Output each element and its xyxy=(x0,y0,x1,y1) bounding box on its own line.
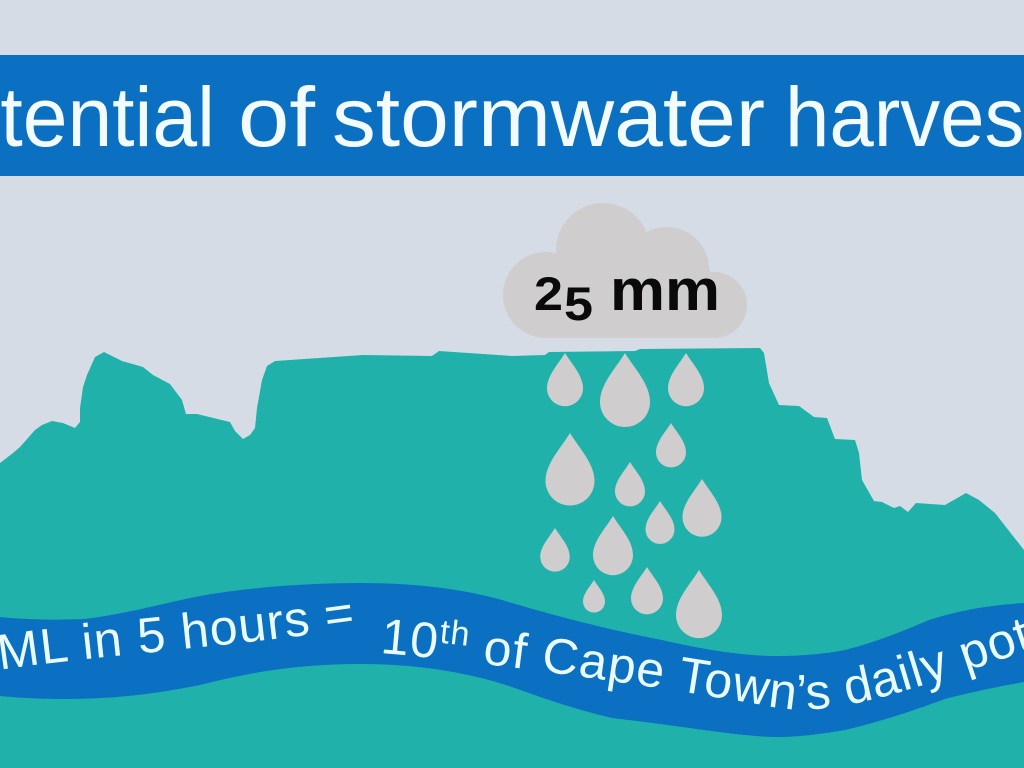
rainfall amount: mm xyxy=(610,258,720,323)
mountain silhouette: Table Mountain xyxy=(0,348,1024,768)
rainfall amount xyxy=(534,258,720,330)
rainfall amount: 5 xyxy=(564,277,593,330)
banner text: volume: ML in 5 hours = xyxy=(0,604,352,670)
rainfall amount: 2 xyxy=(534,267,563,320)
title banner: stormwater xyxy=(332,70,765,164)
banner text: share of potable demand: 10 xyxy=(384,620,436,658)
title banner xyxy=(0,55,1024,176)
banner text: share of potable demand: th xyxy=(441,620,468,646)
banner text: share of potable demand: of Cape Town’s daily pot xyxy=(486,620,1024,710)
raindrops xyxy=(540,353,722,638)
wavy banner xyxy=(0,583,1024,737)
cloud with rainfall label xyxy=(503,203,747,338)
title banner: of xyxy=(238,70,316,164)
